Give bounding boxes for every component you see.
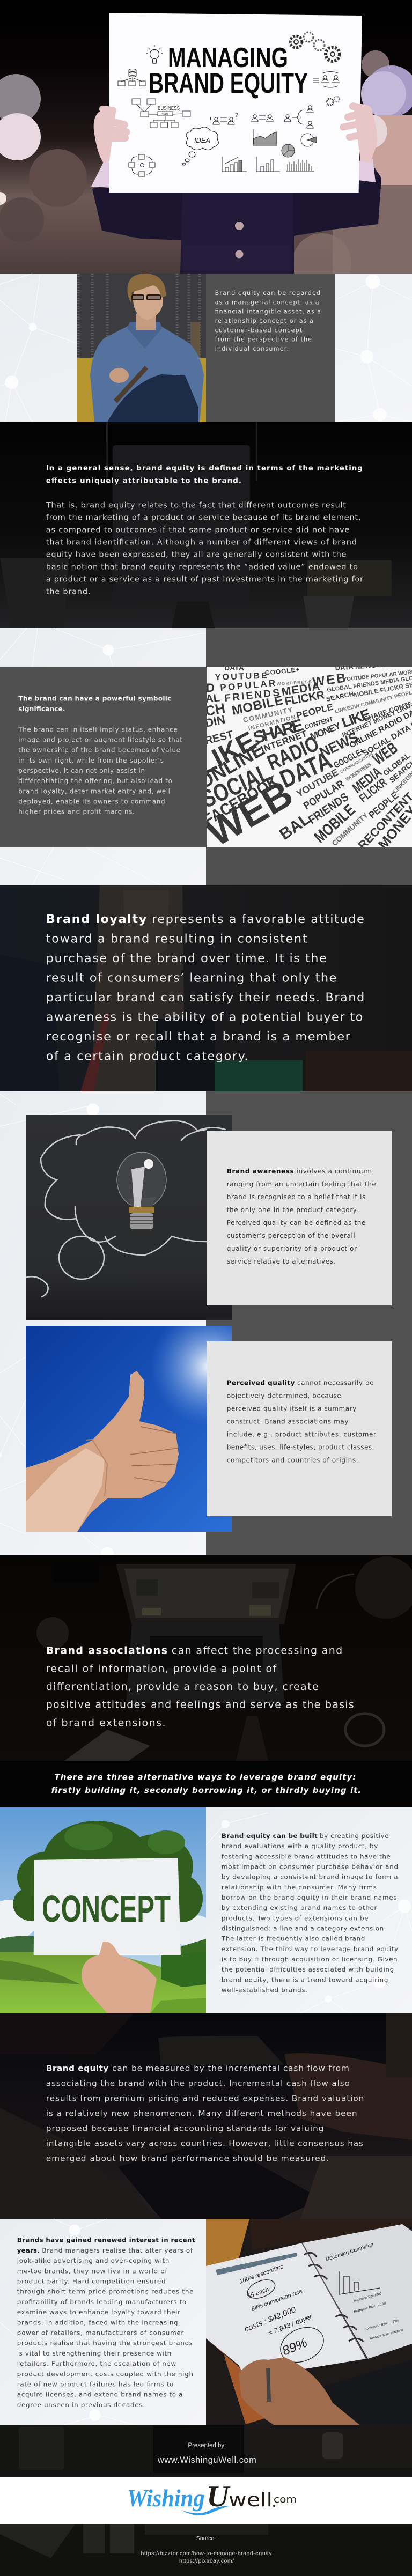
handwritten notes: average buyer purchase xyxy=(370,2328,404,2341)
word cloud image: YOUTUBE xyxy=(215,671,267,682)
body text: distinguished: a line and a category extension. xyxy=(222,1924,386,1932)
photo: concept card with tree xyxy=(0,1807,215,2013)
word cloud image: SOCIAL xyxy=(197,758,274,813)
word cloud image: LIKE xyxy=(193,726,261,781)
footer: sources: Source: xyxy=(196,2535,216,2542)
body text: proposed because financial accounting standards for valuing xyxy=(46,2124,323,2134)
card: brand awareness: ranging from an uncertain feeling that the xyxy=(227,1180,376,1188)
body text: differentiating the offering, but also lead to xyxy=(18,777,172,785)
body text: deployed, enable its owners to command xyxy=(18,798,165,806)
intro paragraph: individual consumer. xyxy=(215,345,289,352)
word cloud image: FRIENDS xyxy=(306,790,351,826)
icon: business plan diagram xyxy=(132,99,190,128)
icon: business plan diagram: BUSINESS xyxy=(158,106,180,112)
tree xyxy=(13,1821,203,1922)
handwritten notes: $5 each xyxy=(245,2285,270,2300)
body text: That is, brand equity relates to the fact that different outcomes result xyxy=(46,500,346,510)
handwritten notes: 100% responders xyxy=(239,2263,285,2285)
banner: three alternative ways xyxy=(0,1761,412,1807)
body text: Brand loyalty xyxy=(46,912,147,926)
word cloud image: DATA xyxy=(224,663,244,672)
hero panel xyxy=(0,13,412,274)
body text: represents a favorable attitude xyxy=(152,912,364,926)
logo band: wishinguwell.com xyxy=(0,2477,412,2524)
word cloud image: D xyxy=(206,681,215,695)
handwritten notes: Response Rate → 10% xyxy=(354,2302,387,2314)
word cloud image: GOOGLE+ xyxy=(264,666,300,677)
body text: is a relatively new phenomenon. Many different methods have been xyxy=(46,2109,357,2119)
word cloud image: POPULAR xyxy=(301,778,347,812)
icon: team exchange xyxy=(313,72,340,105)
network background xyxy=(0,628,206,885)
word cloud image: PEOPLE xyxy=(367,790,401,821)
body text xyxy=(221,1832,398,1994)
word cloud image: DATA xyxy=(276,746,336,793)
notebook pages xyxy=(206,2243,366,2379)
poster title: MANAGING xyxy=(168,42,288,73)
poster: managing brand equity xyxy=(94,13,377,193)
body text: Brand managers realise that after years of xyxy=(42,2247,193,2254)
banner: three alternative ways: firstly building it, secondly borrowing it, or thirdly buying it. xyxy=(52,1785,361,1795)
background photo: desk and monitor xyxy=(0,422,392,628)
chalk thought cloud xyxy=(26,1121,225,1297)
photo: thumbs up xyxy=(26,1326,232,1532)
body text: power of retailers, manufacturers of consumer xyxy=(17,2329,184,2336)
word cloud image: MOBILE xyxy=(311,801,359,846)
body text: is to buy it through acquisition or licensing. Given xyxy=(222,1955,398,1963)
bulb xyxy=(117,1152,166,1229)
word cloud image: INTERNET MONEY LIKE xyxy=(341,702,411,739)
card: brand awareness: brand is recognised to a belief that it is xyxy=(227,1193,365,1201)
word cloud image: FACEBOOK xyxy=(201,772,282,829)
icon: light bulb xyxy=(146,45,163,63)
logo band: wishinguwell.com: com xyxy=(274,2494,297,2505)
woman in suit xyxy=(91,159,381,274)
handwritten notes: costs : $42,000 xyxy=(243,2305,297,2334)
footer: presented by: www.WishinguWell.com xyxy=(157,2455,256,2465)
body text: through short-term price promotions reduces the xyxy=(17,2288,194,2295)
word cloud image: PEOPLE xyxy=(295,702,334,721)
body text: by developing a consistent brand image to form a xyxy=(222,1873,398,1881)
body text: recognise or recall that a brand is a member xyxy=(46,1030,351,1044)
icon: idea cloud: IDEA xyxy=(194,136,210,144)
word cloud image: ONLINE xyxy=(194,737,268,793)
word cloud image: CH xyxy=(204,700,226,719)
word cloud image: GLOBAL xyxy=(381,751,412,777)
handwritten notes: Upcoming Campaign xyxy=(325,2241,374,2263)
word cloud image: WORDPRESS xyxy=(345,762,373,783)
background photo: desk items xyxy=(19,2425,412,2473)
handwritten notes xyxy=(239,2241,404,2359)
body text: the brand. xyxy=(46,587,90,596)
body text: differentiation, provide a reason to buy, create xyxy=(46,1681,319,1693)
word cloud image: SEARCH xyxy=(326,690,354,703)
body text: intangible assets vary across countries. However, little consensus has xyxy=(46,2139,363,2149)
word cloud image: WEB xyxy=(312,671,347,690)
word cloud image: POPULAR xyxy=(220,678,276,693)
body text: extension. The third way to leverage brand equity xyxy=(222,1945,398,1953)
word cloud image: SHARE xyxy=(251,715,305,748)
word cloud image: FLICKR xyxy=(357,775,389,805)
background photo: phone and laptop xyxy=(0,2013,412,2219)
icon: gears xyxy=(290,32,340,61)
body text: years. xyxy=(17,2247,40,2254)
word cloud image: FLICKR xyxy=(284,689,326,708)
body text: brand evaluations with a quality product, by xyxy=(222,1842,378,1850)
footer: sources: https://bizztor.com/how-to-manage-brand-equity xyxy=(141,2550,272,2557)
body text: a product or a service as a result of past investments in the marketing for xyxy=(46,575,363,584)
word cloud image: LIKE xyxy=(340,706,373,731)
card: perceived quality: competitors and countries of origins. xyxy=(227,1457,358,1464)
body text: profitability of brands leading manufacturers to xyxy=(17,2298,186,2306)
body text: of a certain product category. xyxy=(46,1049,248,1063)
word cloud image: RADIO xyxy=(264,732,322,775)
body text: can be measured by the incremental cash flow from xyxy=(112,2064,349,2073)
body text xyxy=(46,500,363,596)
section: brand associations xyxy=(0,1555,412,1761)
handwritten notes: 84% conversion rate xyxy=(251,2288,303,2313)
footer: presented by: Presented by: xyxy=(188,2442,226,2449)
card: brand awareness: quality or superiority of a product or xyxy=(227,1245,357,1252)
body text: look-alike advertising and over-coping with xyxy=(17,2257,169,2264)
body text xyxy=(46,2064,364,2164)
word cloud image: MOBILE xyxy=(231,693,284,718)
body text: equity have been expressed, they all are generally consistent with the xyxy=(46,550,347,559)
body text: perspective, it can not only assist in xyxy=(18,767,145,774)
card: brand awareness: customer’s perception of the overall xyxy=(227,1232,355,1239)
section: brand equity concept xyxy=(0,274,412,422)
network background xyxy=(0,1094,114,1560)
banner: three alternative ways: There are three alternative ways to leverage brand equity: xyxy=(54,1772,356,1782)
body text: Brand equity can be built xyxy=(222,1832,318,1840)
body text: particular brand can satisfy their needs. Brand xyxy=(46,991,364,1005)
word cloud image: DIN xyxy=(204,713,226,730)
word cloud image: INTERNET xyxy=(260,728,309,755)
body text: of brand extensions. xyxy=(46,1717,166,1729)
footer: sources xyxy=(0,2524,412,2576)
intro paragraph: Brand equity can be regarded xyxy=(215,290,320,297)
heading: The brand can have a powerful symbolic xyxy=(18,695,171,703)
body text: image and project or augment lifestyle so that xyxy=(18,736,182,743)
body text: toward a brand resulting in consistent xyxy=(46,932,307,946)
card: brand awareness: involves a continuum xyxy=(296,1168,372,1175)
intro paragraph: financial intangible asset, as a xyxy=(215,308,321,315)
body text: Brand equity xyxy=(46,2064,108,2073)
body text: products. Two types of extensions can be xyxy=(222,1914,369,1922)
body text: from the marketing of a product or service because of its brand element, xyxy=(46,513,361,522)
handwritten notes: 89% xyxy=(280,2336,310,2359)
card: perceived quality: include, e.g., product attributes, customer xyxy=(227,1431,376,1438)
body text: Brand associations xyxy=(46,1645,167,1657)
body text: degree unseen in previous decades. xyxy=(17,2401,145,2409)
word cloud image: WORDPRESS xyxy=(277,679,312,687)
word cloud image xyxy=(207,667,412,847)
body text: by extending existing brand names to other xyxy=(222,1904,377,1911)
body text: borrow on the brand equity in their brand names xyxy=(222,1894,397,1901)
card: perceived quality: objectively determined, because xyxy=(227,1392,341,1400)
icon: people exchange xyxy=(210,106,313,128)
logo band: wishinguwell.com: well xyxy=(229,2489,273,2511)
icon: business plan diagram: PLAN xyxy=(161,113,168,116)
body text: the potential difficulties associated with building xyxy=(222,1966,394,1973)
heading xyxy=(46,464,363,485)
word cloud image: NEWS xyxy=(317,729,360,761)
body text: positive attitudes and feelings and serve as the basis xyxy=(46,1699,354,1711)
word cloud image: CONTENT xyxy=(304,715,334,731)
intro paragraph: relationship concept or as a xyxy=(215,318,313,324)
card: brand awareness: Brand awareness xyxy=(227,1168,294,1175)
icon: database org chart xyxy=(118,69,145,86)
body text: results from premium pricing and reduced expenses. Brand valuation xyxy=(46,2094,364,2103)
bokeh lights xyxy=(0,50,412,292)
heading: In a general sense, brand equity is defined in terms of the marketing xyxy=(46,464,363,473)
handwritten notes: = 7,843 / buyer xyxy=(267,2312,313,2337)
intro paragraph: as a managerial concept, as a xyxy=(215,299,319,306)
card: perceived quality: Perceived quality xyxy=(227,1379,295,1387)
body text: products realise that having the strongest brands xyxy=(17,2339,193,2347)
section: brand equity can be built xyxy=(0,1807,412,2013)
panel: symbolic text xyxy=(0,667,206,847)
word cloud image: MEDIA xyxy=(281,680,321,698)
body text: is vital to strengthening their presence with xyxy=(17,2350,171,2357)
network background xyxy=(206,1813,412,2013)
section: brand equity measurement xyxy=(0,2013,412,2219)
network background xyxy=(0,2219,134,2425)
heading: effects uniquely attributable to the brand. xyxy=(46,477,241,485)
background photo: desk items xyxy=(0,2524,268,2558)
card: brand awareness: Perceived quality can be defined as the xyxy=(227,1219,365,1227)
intro paragraph: from the perspective of the xyxy=(215,336,312,343)
body text: The brand can in itself imply status, enhance xyxy=(18,726,178,733)
body text: emerged about how brand performance should be measured. xyxy=(46,2154,329,2164)
poster title: BRAND EQUITY xyxy=(149,68,308,99)
body text: The latter is frequently also called brand xyxy=(221,1935,365,1943)
icon: people exchange: ? xyxy=(235,112,238,119)
word cloud image: MEDIA xyxy=(349,764,385,796)
word cloud image: COMMUNICATION xyxy=(339,751,374,774)
word cloud image: REST xyxy=(204,729,234,747)
body text: associating the brand with the product. Incremental cash flow also xyxy=(46,2079,350,2088)
word cloud image: YOUTUBE xyxy=(295,767,340,799)
footer: presented by xyxy=(0,2425,412,2477)
body text: purchase of the brand over time. It is the xyxy=(46,951,327,965)
body text: recall of information, provide a point of xyxy=(46,1663,277,1674)
card: concept xyxy=(34,1858,181,1955)
body text: brands. In addition, faced with the increasing xyxy=(17,2319,178,2326)
word cloud image: GOOGLE+ xyxy=(332,746,366,771)
body text: product parity. Hard competition ensured xyxy=(17,2277,166,2285)
body text: the ownership of the brand becomes of value xyxy=(18,747,180,754)
body text: retailers. Furthermore, the escalation of new xyxy=(17,2360,176,2367)
hands holding poster xyxy=(94,102,377,164)
logo swoosh xyxy=(181,2506,230,2515)
heading: significance. xyxy=(18,705,65,713)
section: general sense definition xyxy=(0,422,412,628)
body text: well-established brands. xyxy=(222,1987,307,1994)
panel: dark text xyxy=(206,274,335,422)
card: perceived quality: cannot necessarily be xyxy=(297,1379,373,1387)
spiral rings xyxy=(304,2253,364,2342)
body text: by creating positive xyxy=(320,1832,388,1840)
body text xyxy=(46,912,364,1063)
body text: brand loyalty, deter market entry and, well xyxy=(18,787,170,795)
word cloud image: AL xyxy=(205,692,220,705)
network background xyxy=(0,274,412,422)
card: brand awareness xyxy=(207,1131,392,1305)
body text: relationship with the consumer. Many firms xyxy=(222,1884,377,1891)
word cloud image: INFORMATION xyxy=(248,714,296,732)
intro paragraph xyxy=(215,290,321,352)
body text: awareness is the ability of a potential buyer to xyxy=(46,1010,363,1024)
body text: basic notion that brand equity represents the “added value” endowed to xyxy=(46,563,358,572)
charts drawn on poster xyxy=(222,129,317,172)
section: awareness and quality xyxy=(0,1091,412,1560)
background photo: laptop on desk xyxy=(36,1556,412,1761)
body text: in its own right, while from the supplier’s xyxy=(18,757,164,764)
body text: acquire licenses, and extend brand names to a xyxy=(17,2391,182,2398)
body text xyxy=(17,2237,195,2409)
section: brand loyalty xyxy=(0,885,412,1091)
body text: higher prices and profit margins. xyxy=(18,808,135,816)
body text: Brands have gained renewed interest in recent xyxy=(17,2237,195,2244)
word cloud image: FRIENDS xyxy=(224,687,280,704)
heading xyxy=(18,695,171,713)
hand holding card xyxy=(82,1942,157,2013)
word cloud image: WEB xyxy=(370,739,401,769)
word cloud image: WEB xyxy=(200,772,300,855)
card: brand awareness: service relative to alternatives. xyxy=(227,1258,335,1265)
poster title xyxy=(150,47,308,99)
background photo: shopper xyxy=(0,885,412,1091)
word cloud image: COMMUNITY xyxy=(330,810,370,847)
body text: product development costs coupled with the high xyxy=(17,2370,193,2378)
icon: process cycle xyxy=(129,154,155,176)
card: brand awareness: the only one in the product category. xyxy=(227,1206,358,1214)
body text xyxy=(46,1645,354,1729)
body text: me-too brands, they now live in a world of xyxy=(17,2267,167,2275)
word cloud image: BAL xyxy=(276,810,314,844)
body text: fostering accessible brand attitudes to have the xyxy=(222,1852,391,1860)
footer: sources: https://pixabay.com/ xyxy=(179,2558,234,2564)
card: perceived quality xyxy=(207,1341,392,1516)
word cloud image: MONEY xyxy=(308,720,342,742)
body text: that brand identification. Although a number of different views of brand xyxy=(46,537,357,547)
logo band: wishinguwell.com: Wishing xyxy=(127,2484,205,2512)
body text xyxy=(18,726,182,816)
body text: can affect the processing and xyxy=(172,1645,342,1657)
card: concept: CONCEPT xyxy=(42,1888,171,1930)
word cloud image: COMMUNITY xyxy=(242,706,293,724)
section: symbolic significance xyxy=(0,628,412,885)
body text: rate of new product failures has led firms to xyxy=(17,2380,173,2388)
icon: people exchange: ! xyxy=(210,116,211,123)
intro paragraph: customer-based concept xyxy=(215,327,303,334)
body text: brand equity, there is a trend toward acquiring xyxy=(222,1976,388,1983)
photo: notebook and hand xyxy=(206,2219,412,2425)
body text: most impact on consumer purchase behavior and xyxy=(222,1863,398,1871)
logo band: wishinguwell.com: U xyxy=(207,2480,231,2513)
handwritten notes: Audience Size 1500 xyxy=(353,2292,382,2303)
photo: light bulb on chalkboard xyxy=(26,1115,232,1320)
body text: as compared to outcomes if that same product or service did not have xyxy=(46,526,349,534)
section: renewed interest xyxy=(0,2219,412,2425)
handwritten notes: Conversion Rate → 53% xyxy=(364,2319,400,2331)
card: perceived quality: perceived quality itself is a summary xyxy=(227,1405,356,1413)
body text: examine ways to enhance loyalty toward their xyxy=(17,2308,180,2316)
icon: idea cloud xyxy=(182,127,218,165)
card: perceived quality: construct. Brand associations may xyxy=(227,1418,349,1426)
body text: result of consumers’ learning that only the xyxy=(46,971,336,985)
card: perceived quality: benefits, uses, life-styles, product classes, xyxy=(227,1444,374,1451)
hand with pen xyxy=(239,2357,359,2425)
photo: man writing xyxy=(77,274,206,422)
